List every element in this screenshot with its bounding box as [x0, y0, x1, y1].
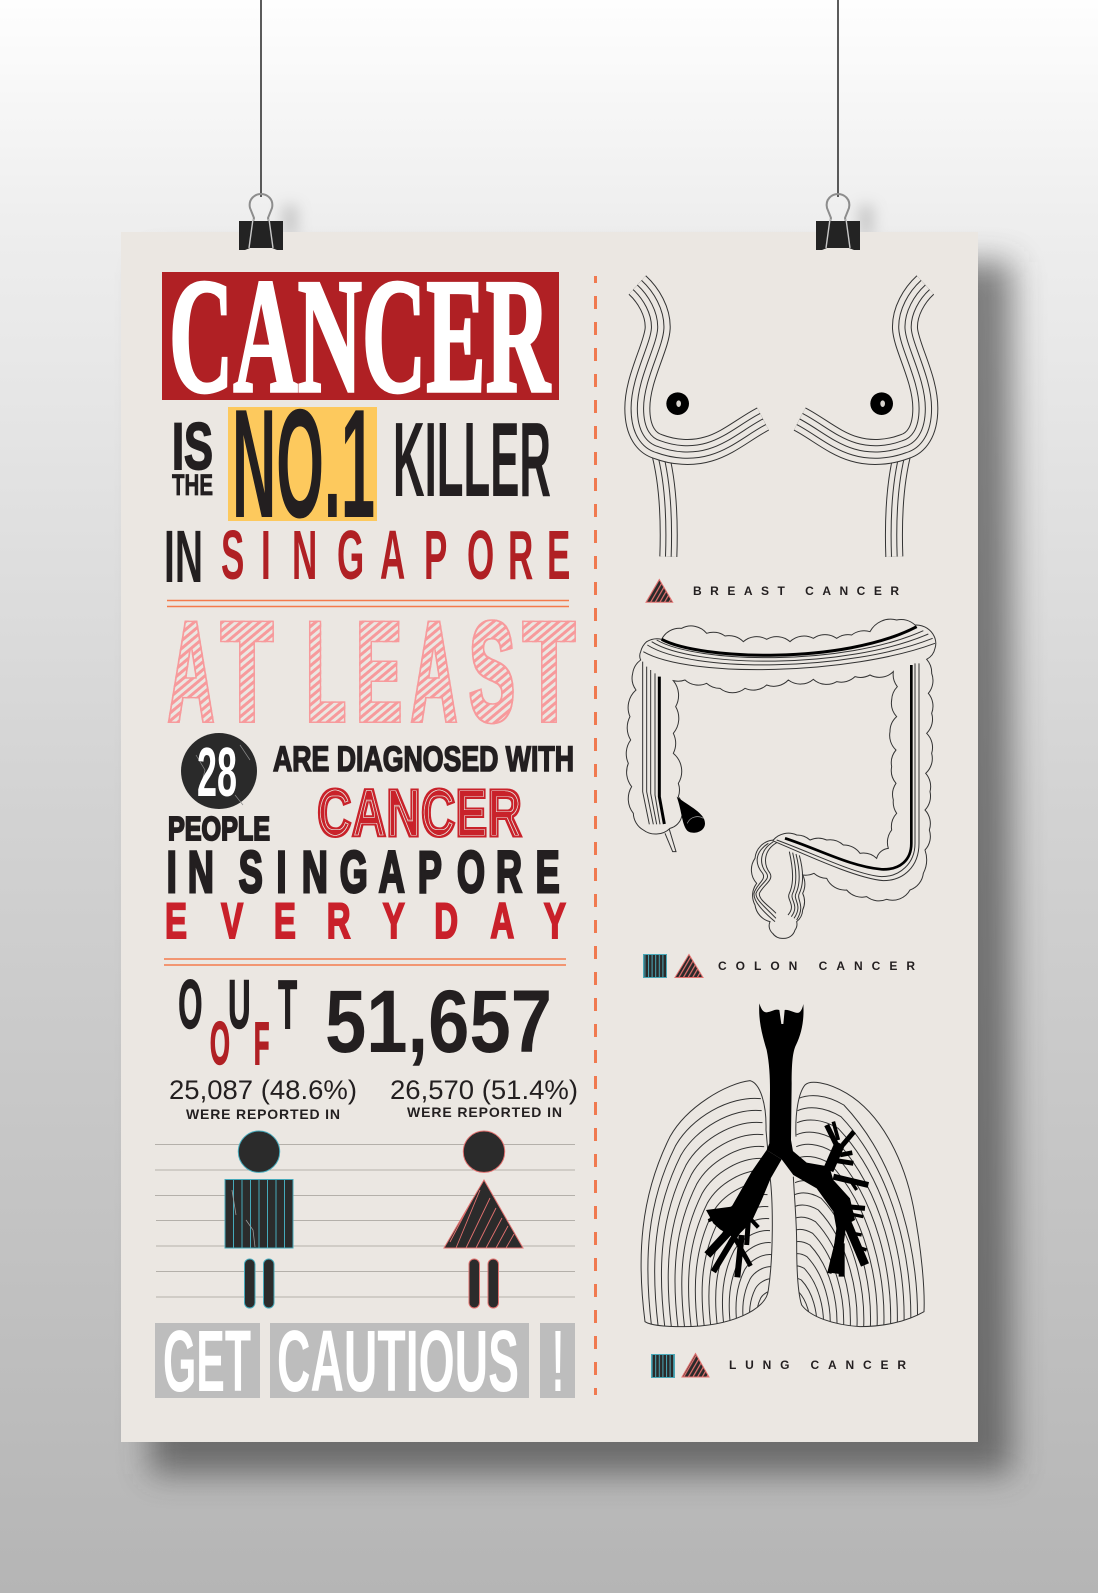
text: out of: OUT [178, 967, 297, 1043]
heading: at least: L [306, 593, 346, 750]
text: KILLER [393, 401, 551, 519]
title block: cancer: CANCER [169, 246, 551, 427]
legend: lung cancer [652, 1354, 906, 1378]
dashed vertical divider [594, 276, 597, 1395]
heading: in singapore: IN [164, 515, 203, 598]
heading: is the no.1 killer: IS [172, 409, 213, 483]
divider: orange double rule [164, 959, 566, 965]
heading: at least: E [356, 593, 402, 750]
illustration: lungs [641, 1003, 924, 1327]
number badge: 28 [181, 733, 257, 811]
binder clip left with string [239, 0, 283, 250]
title block: cancer [162, 246, 559, 427]
text: people: PEOPLE [168, 810, 270, 847]
text: are diagnosed with: ARE DIAGNOSED WITH [273, 740, 574, 779]
clip shadows [282, 205, 874, 235]
legend: colon cancer [644, 954, 915, 978]
horizontal ruled lines [155, 1144, 575, 1297]
callout: get cautious: CAUTIOUS [277, 1313, 519, 1410]
divider: orange double rule [167, 600, 569, 606]
stat: female count [390, 1075, 578, 1120]
stat: male count [169, 1075, 357, 1122]
stat: female count: 26,570 (51.4%) [390, 1075, 578, 1105]
legend: breast cancer: BREAST CANCER [693, 584, 899, 598]
stat: male count: 25,087 (48.6%) [169, 1075, 357, 1105]
text: cancer beveled: CANCER [317, 776, 522, 851]
number badge: 28: 28 [197, 733, 237, 811]
heading: at least: A [168, 593, 214, 750]
text: everyday: EVERYDAY [165, 893, 566, 949]
icon: female figure [444, 1131, 523, 1308]
poster shadow [150, 262, 1012, 1474]
binder clip right with string [816, 0, 860, 250]
heading: is the no.1 killer: THE [172, 469, 213, 502]
heading: at least: T [523, 593, 575, 750]
text: out of [178, 967, 297, 1077]
icon: male figure [225, 1131, 293, 1308]
legend: colon cancer: COLON CANCER [718, 959, 915, 973]
legend: lung cancer: LUNG CANCER [729, 1358, 906, 1372]
illustration: colon [626, 619, 936, 938]
text: in singapore: IN SINGAPORE [167, 840, 560, 905]
callout: get cautious [155, 1313, 575, 1410]
heading: at least: T [221, 593, 273, 750]
heading: at least: S [469, 593, 515, 750]
number: 51,657: 51,657 [325, 971, 552, 1071]
poster sheet [121, 232, 978, 1442]
illustration: breasts [637, 285, 925, 557]
stat: male count: WERE REPORTED IN [186, 1106, 340, 1122]
callout: get cautious: GET [163, 1313, 251, 1410]
legend: breast cancer [646, 580, 899, 602]
stat: female count: WERE REPORTED IN [407, 1104, 562, 1120]
heading: at least: A [411, 593, 457, 750]
heading: in singapore: SINGAPORE [221, 516, 570, 594]
text: out of: OF [210, 1009, 269, 1077]
heading: is the no.1 killer: NO.1 [232, 377, 375, 550]
callout: get cautious: ! [552, 1313, 564, 1410]
